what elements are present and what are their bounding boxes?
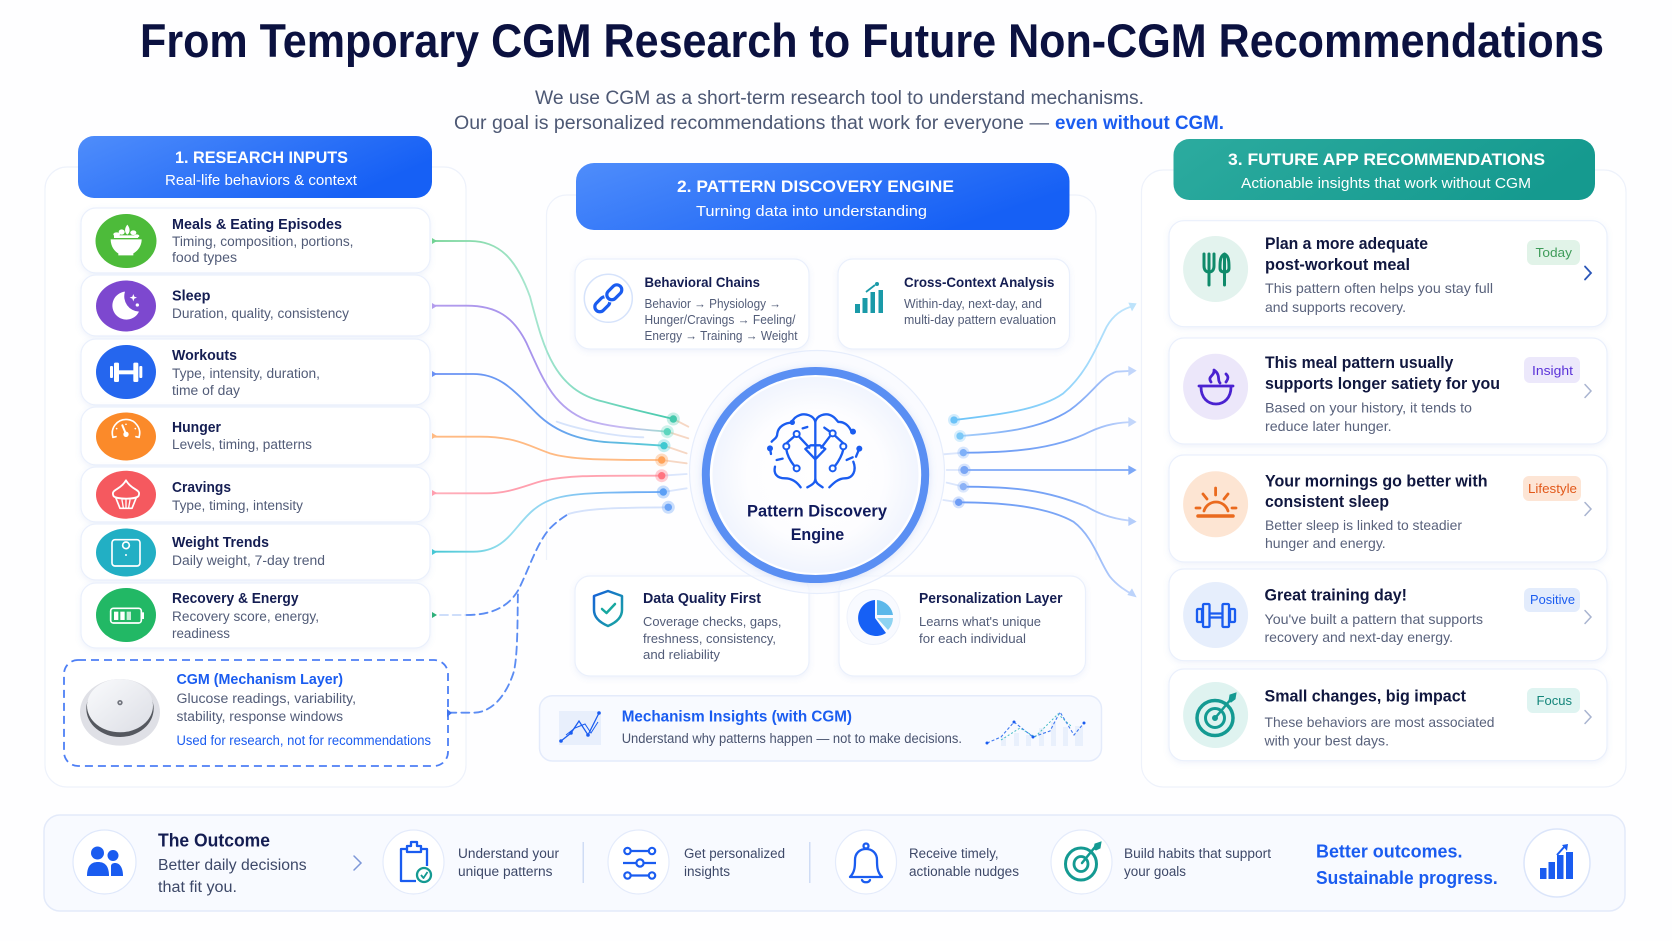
step: personalized insights: insights [684,864,730,879]
card: hunger: Levels, timing, patterns [172,437,312,452]
callout: CGM mechanism layer [64,660,452,766]
icon: clipboard [401,842,431,882]
card: behavioral chains [575,259,809,349]
recommendation: small changes: These behaviors are most associated [1264,714,1494,730]
card: data quality first: freshness, consistency, [643,631,776,646]
chevron [1585,384,1591,398]
step: timely nudges [836,830,1019,894]
heading: research inputs: Real-life behaviors & context [165,172,358,189]
recommendation: consistent sleep: consistent sleep [1265,493,1389,511]
card: workouts: Type, intensity, duration, [172,366,320,381]
card: personalization layer [839,576,1086,676]
recommendation: consistent sleep: Your mornings go better with [1265,473,1488,491]
heading: future app recommendations [1174,139,1595,200]
card: data quality first [575,576,809,676]
card: personalization layer: Learns what's unique [919,614,1041,629]
callout: CGM mechanism layer: CGM (Mechanism Layer) [176,672,343,688]
icon: weighing scale [112,540,140,566]
panel: future app recommendations [1169,139,1607,761]
card: cravings [81,467,430,522]
connectors from inputs to engine [433,241,688,713]
card: weight trends [81,524,430,580]
icon: target [1066,842,1101,880]
connectors from engine to recommendations [943,303,1137,597]
card: personalization layer: Personalization Layer [919,591,1063,607]
icon: battery [111,608,144,623]
card: sleep: Duration, quality, consistency [172,306,349,321]
recommendation: post-workout meal [1169,221,1607,327]
recommendation: great training day [1169,569,1607,661]
card: behavioral chains: Energy → Training → Weight [644,329,798,343]
icon: bowl [1199,370,1233,404]
icon: shield [594,591,622,626]
step: timely nudges: Receive timely, [909,846,999,861]
icon: dumbbell [110,363,142,382]
card: hunger [81,407,430,465]
card: recovery and energy [81,583,430,648]
step: personalized insights: Get personalized [684,846,785,861]
card: data quality first: Data Quality First [643,591,761,607]
left card connector stubs [432,238,437,618]
card: data quality first: and reliability [643,647,721,662]
card: sleep: Sleep [172,288,211,304]
card: mechanism insights [540,696,1102,761]
card: cravings: Type, timing, intensity [172,498,303,513]
callout: CGM mechanism layer: Glucose readings, variability, [176,691,356,706]
step: understand patterns [383,830,560,894]
subtitle: We use CGM as a short-term research tool to understand mechanisms. [535,88,1144,109]
card: workouts [81,339,430,405]
card: weight trends: Weight Trends [172,535,269,551]
card: meals: Timing, composition, portions, [172,234,354,249]
outcome text: The Outcome [158,831,270,851]
icon: people [73,830,136,894]
recommendation: great training day: You've built a pattern that supports [1264,611,1483,627]
closing statement: Sustainable progress. [1316,868,1498,888]
icon: gauge [112,419,140,437]
step: build habits [1051,830,1271,894]
badge: lifestyle: Lifestyle [1528,481,1577,496]
recommendation: consistent sleep: Better sleep is linked to steadier [1265,517,1462,533]
card: mechanism insights: Understand why patterns happen — not to make decisions. [622,731,962,746]
icon: salad bowl [111,225,142,255]
mini trend chart [986,712,1086,746]
icon: cupcake [113,480,139,508]
badge: insight [1524,357,1580,383]
engine circle: Engine [791,525,844,544]
heading: research inputs: 1. RESEARCH INPUTS [175,149,348,167]
icon: line chart [559,711,601,745]
card: cross-context analysis: Cross-Context Analysis [904,274,1055,290]
step: understand patterns: unique patterns [458,864,553,879]
card: workouts: time of day [172,383,240,398]
recommendation: small changes: Small changes, big impact [1264,688,1466,706]
callout: CGM mechanism layer: Used for research, not for recommendations [176,733,431,748]
badge: positive: Positive [1530,592,1575,607]
icon: bar trend [855,282,883,313]
card: cross-context analysis: Within-day, next-day, and [904,297,1042,311]
icon: fork and knife [1204,254,1229,285]
badge: insight: Insight [1532,363,1573,378]
subtitle: Our goal is personalized recommendations that work for everyone — [454,113,1049,134]
card: cross-context analysis [838,259,1070,349]
card: meals: food types [172,250,237,265]
card: behavioral chains: Behavioral Chains [644,274,760,290]
panel backgrounds [45,167,1626,787]
step: understand patterns: Understand your [458,846,560,861]
card: workouts: Workouts [172,348,237,364]
icon: sunrise [1196,488,1236,516]
heading: pattern discovery engine [576,163,1070,230]
recommendation: great training day: Great training day! [1264,587,1407,605]
card: cross-context analysis: multi-day pattern evaluation [904,313,1056,327]
card: sleep [81,275,430,336]
badge: lifestyle [1523,476,1581,501]
left connector end dots [655,412,680,514]
right connector start dots [948,414,971,508]
step: build habits: your goals [1124,864,1186,879]
panel: pattern discovery engine [540,163,1102,761]
closing statement [1316,842,1498,888]
panel: the outcome [44,815,1625,911]
heading: pattern discovery engine: Turning data into understanding [696,203,927,220]
callout: CGM mechanism layer: stability, response windows [176,709,343,724]
icon: sliders [623,848,656,879]
badge: today: Today [1536,245,1573,260]
card: behavioral chains: Behavior → Physiology → [644,297,781,311]
icon: growth chart [1524,829,1590,897]
chevron [1585,502,1591,516]
recommendation: satiety [1169,338,1607,444]
panel: research inputs [64,136,452,766]
badge: today [1527,240,1580,265]
card: recovery and energy: Recovery score, energy, [172,609,319,624]
card: mechanism insights: Mechanism Insights (with CGM) [622,709,852,726]
step: build habits: Build habits that support [1124,846,1271,861]
badge: focus [1527,688,1580,713]
card: behavioral chains: Hunger/Cravings → Feeling/ [644,313,796,327]
heading: research inputs [78,136,432,198]
recommendation: post-workout meal: This pattern often helps you stay full [1265,280,1493,296]
engine circle: Pattern Discovery [747,502,888,520]
card: cravings: Cravings [172,480,231,496]
card: personalization layer: for each individual [919,631,1026,646]
outcome text [158,831,307,896]
icon: dumbbell outline [1197,604,1235,627]
recommendation: consistent sleep [1169,455,1607,562]
card: recovery and energy: readiness [172,626,230,641]
heading: future app recommendations: 3. FUTURE APP RECOMMENDATIONS [1228,151,1545,169]
icon: bell [850,844,882,882]
chevron [1585,610,1591,624]
recommendation: small changes [1169,669,1607,761]
card: recovery and energy: Recovery & Energy [172,591,298,607]
heading: pattern discovery engine: 2. PATTERN DISCOVERY ENGINE [677,178,954,196]
icon: moon [112,292,139,320]
recommendation: post-workout meal: and supports recovery. [1265,299,1406,315]
closing statement: Better outcomes. [1316,842,1462,862]
recommendation: small changes: with your best days. [1263,733,1389,749]
icon: pie chart [858,600,893,636]
recommendation: satiety: supports longer satiety for you [1265,375,1500,393]
chevron [1585,266,1591,280]
subtitle [454,88,1224,134]
chevron [1585,710,1591,724]
chevron [354,856,361,870]
card: data quality first: Coverage checks, gaps, [643,614,782,629]
icon: CGM sensor [80,679,160,746]
outcome text: that fit you. [158,879,237,896]
engine circle [690,350,944,594]
card: meals: Meals & Eating Episodes [172,217,342,233]
badge: positive [1524,588,1580,612]
icon: target [1197,693,1236,736]
recommendation: satiety: reduce later hunger. [1265,418,1392,434]
recommendation: post-workout meal: post-workout meal [1265,256,1410,274]
icon: brain network [767,414,862,487]
badge: focus: Focus [1536,693,1572,708]
card: hunger: Hunger [172,420,221,436]
outcome text: Better daily decisions [158,857,307,874]
subtitle: even without CGM. [1055,113,1224,134]
recommendation: satiety: This meal pattern usually [1265,354,1454,372]
recommendation: post-workout meal: Plan a more adequate [1265,235,1428,253]
card: weight trends: Daily weight, 7-day trend [172,553,325,568]
heading: future app recommendations: Actionable insights that work without CGM [1241,175,1531,192]
recommendation: great training day: recovery and next-day energy. [1264,629,1453,645]
arrowheads [1127,303,1137,597]
recommendation: satiety: Based on your history, it tends to [1265,400,1472,416]
icon: chain link [593,283,624,314]
step: personalized insights [608,830,785,894]
recommendation: consistent sleep: hunger and energy. [1265,535,1386,551]
step: timely nudges: actionable nudges [909,864,1019,879]
card: meals [81,208,430,273]
